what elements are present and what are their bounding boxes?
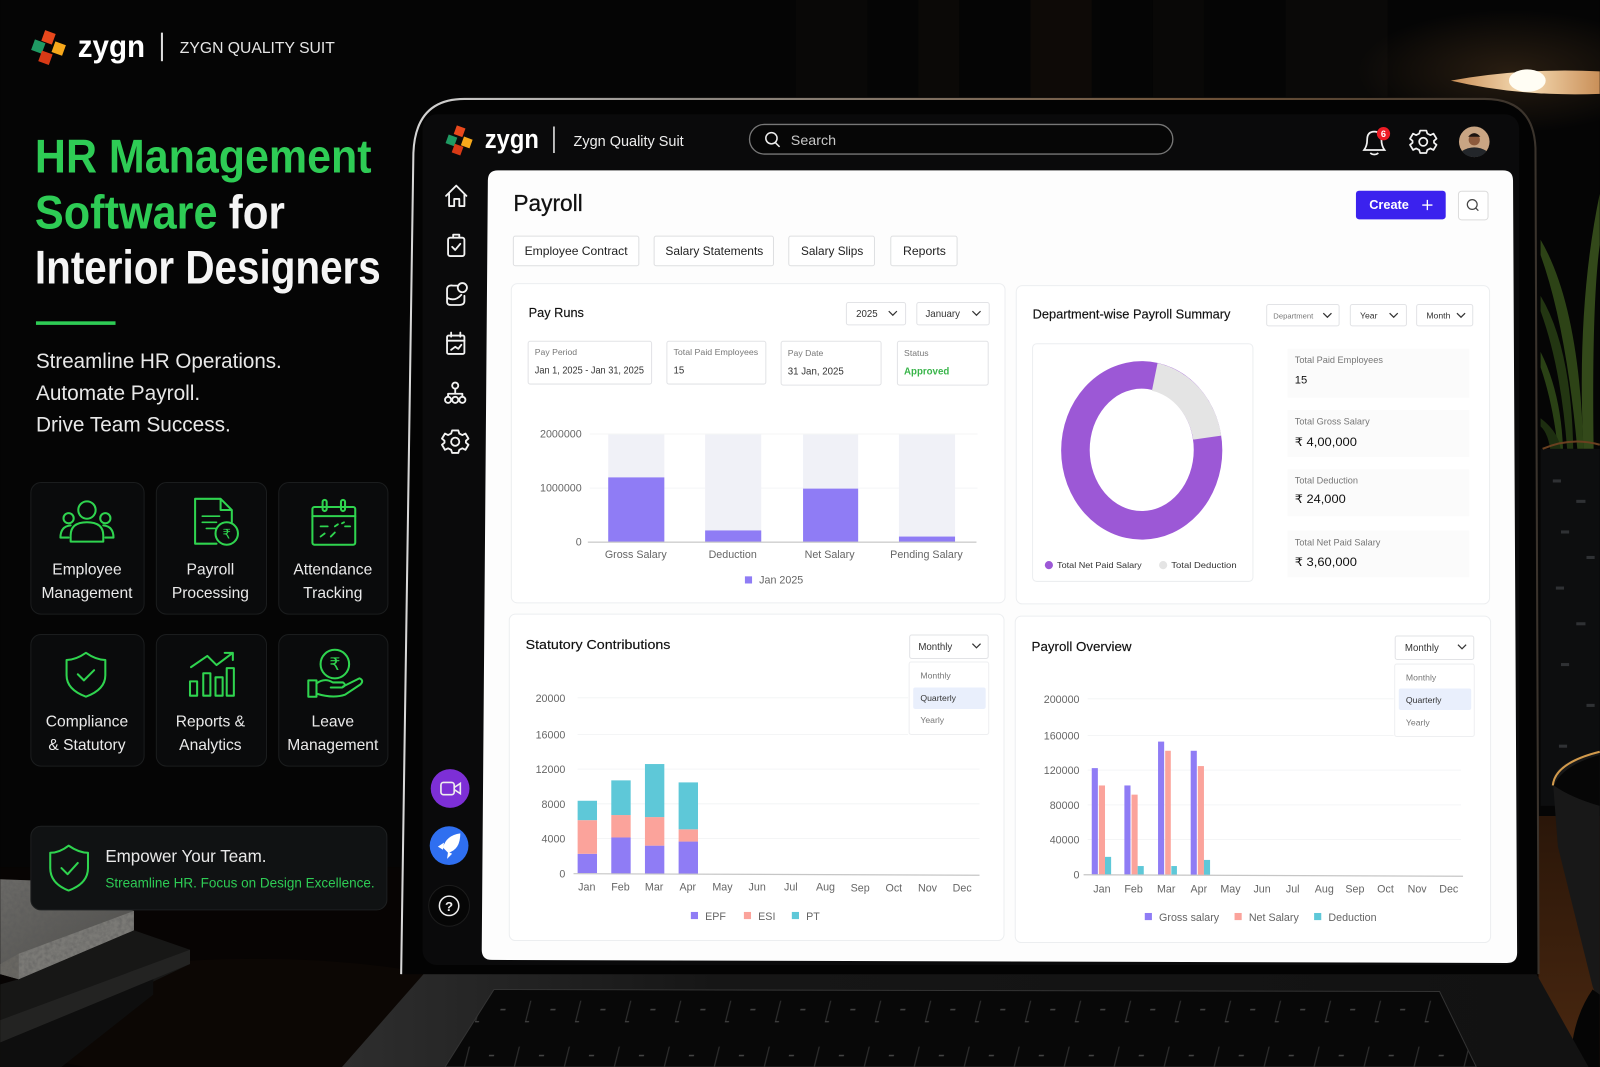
dropdown menu: Quarterly — [1406, 695, 1442, 705]
dropdown: month: Month — [1426, 310, 1451, 320]
grouped bar chart: payroll: 200000 — [1044, 694, 1080, 706]
bar chart: pay runs: 1000000 — [540, 483, 582, 495]
dropdown: month — [917, 302, 989, 325]
grouped bar chart: payroll: Jul — [1286, 884, 1300, 896]
dropdown: monthly: Monthly — [1405, 643, 1439, 654]
icon: logo squares — [31, 30, 66, 65]
tab: reports: Reports — [903, 245, 946, 258]
icon: calendar — [447, 333, 464, 354]
button: video — [431, 769, 469, 808]
tab: salary slips — [789, 236, 874, 266]
grouped bar chart: payroll: Nov — [1408, 884, 1427, 896]
feature card: payroll processing — [156, 482, 266, 614]
grouped bar chart: payroll: Jun — [1253, 884, 1271, 896]
laptop screen frame — [401, 99, 1539, 974]
dropdown: year — [846, 302, 906, 325]
bar chart: pay runs: 2000000 — [540, 429, 582, 441]
stacked bar chart: statutory: Nov — [918, 883, 938, 895]
feature card: employee management: Employee — [52, 561, 122, 578]
stat: total paid employees: 15 — [674, 365, 684, 376]
grouped bar chart: payroll: Sep — [1345, 884, 1364, 896]
divider — [553, 126, 555, 153]
icon: payroll document: ₹ — [222, 527, 231, 542]
create button: Create — [1369, 197, 1409, 212]
dropdown menu: Yearly — [1406, 717, 1430, 727]
main white content panel — [482, 170, 1517, 963]
feature card: attendance tracking: Tracking — [303, 585, 362, 602]
tabs — [513, 236, 957, 266]
donut chart: Total Net Paid Salary — [1057, 560, 1142, 570]
feature card: payroll processing: Processing — [172, 585, 249, 602]
stacked bar chart: statutory: Jan — [578, 882, 595, 894]
grouped bar chart: payroll — [1044, 694, 1463, 924]
stacked bar chart: statutory: 12000 — [536, 764, 565, 776]
stat: status: Approved — [904, 366, 949, 377]
callout heading: Empower Your Team. — [105, 846, 266, 866]
divider — [161, 33, 163, 61]
icon: hand with rupee: ₹ — [329, 654, 340, 674]
feature card: employee management — [31, 482, 144, 614]
feature card: reports and analytics: Reports & — [176, 713, 246, 730]
tab: employee contract: Employee Contract — [525, 245, 628, 258]
stat: total paid employees: 15 — [1295, 375, 1307, 387]
bar chart: pay runs: Jan 2025 — [759, 574, 803, 586]
tab: salary statements — [654, 236, 773, 266]
stat: total gross salary — [1288, 410, 1469, 457]
suite name: ZYGN QUALITY SUIT — [180, 40, 335, 57]
feature card: reports and analytics: Analytics — [179, 737, 242, 754]
search bar: Search — [791, 133, 836, 149]
stacked bar chart: statutory: 8000 — [542, 799, 565, 811]
feature card: attendance tracking: Attendance — [293, 561, 372, 578]
app logo text: zygn — [485, 124, 539, 154]
icon: app logo — [446, 125, 473, 155]
grouped bar chart: payroll: Oct — [1377, 884, 1394, 896]
stacked bar chart: statutory: ESI — [758, 911, 775, 923]
feature card: attendance tracking — [279, 482, 388, 614]
stacked bar chart: statutory: May — [712, 882, 733, 894]
stat: pay period — [528, 341, 652, 384]
grouped bar chart: payroll: Feb — [1124, 884, 1143, 896]
bar chart: pay runs: Net Salary — [805, 549, 855, 561]
heading: statutory contributions: Statutory Contributions — [526, 637, 670, 652]
grouped bar chart: payroll: Net Salary — [1249, 912, 1299, 924]
search button — [1458, 191, 1488, 220]
dropdown menu: Monthly — [1406, 672, 1437, 682]
stat: total paid employees — [1288, 349, 1469, 398]
stacked bar chart: statutory: Apr — [679, 882, 697, 894]
callout text: Streamline HR. Focus on Design Excellence. — [105, 875, 375, 891]
heading: pay runs: Pay Runs — [529, 305, 584, 320]
button: help — [429, 885, 469, 926]
stacked bar chart: statutory: 4000 — [542, 834, 565, 846]
icon: settings — [442, 430, 468, 453]
stacked bar chart: statutory: Dec — [953, 883, 972, 895]
panel: statutory contributions — [509, 614, 1004, 941]
stacked bar chart: statutory: Sep — [851, 883, 870, 895]
icon: attendance calendar — [312, 500, 355, 545]
stacked bar chart: statutory: 0 — [559, 868, 565, 880]
grouped bar chart: payroll: Mar — [1157, 884, 1176, 896]
donut chart — [1033, 344, 1253, 581]
grouped bar chart: payroll: 120000 — [1044, 765, 1080, 777]
dropdown: department: Department — [1273, 311, 1314, 320]
stat: pay period: Jan 1, 2025 - Jan 31, 2025 — [535, 365, 644, 376]
stone blocks — [0, 879, 190, 1067]
bar chart: pay runs: Pending Salary — [890, 549, 963, 561]
donut chart: Total Deduction — [1171, 560, 1237, 570]
grouped bar chart: payroll: Apr — [1191, 884, 1208, 896]
icon: team — [60, 501, 113, 542]
stat: total net paid salary: Total Net Paid Salary — [1295, 538, 1381, 548]
panel: payroll overview — [1015, 616, 1491, 943]
icon: org chart — [445, 383, 465, 403]
icon: shield check — [67, 653, 105, 697]
tab: salary slips: Salary Slips — [801, 245, 863, 258]
heading: department summary: Department-wise Payroll Summary — [1033, 306, 1231, 321]
icon: home — [446, 186, 466, 206]
stat: total deduction: ₹ 24,000 — [1295, 493, 1346, 506]
bar chart: pay runs: Gross Salary — [605, 549, 667, 561]
subheading: Streamline HR Operations. — [36, 349, 282, 373]
stat: total deduction: Total Deduction — [1295, 476, 1358, 486]
dropdown menu — [909, 662, 989, 734]
headline — [35, 130, 381, 294]
stacked bar chart: statutory: 16000 — [536, 730, 565, 742]
plant — [1541, 194, 1600, 454]
feature card: compliance and statutory: & Statutory — [48, 737, 126, 754]
button: rocket — [430, 826, 468, 865]
plant pot — [1541, 441, 1600, 806]
stacked bar chart: statutory: Mar — [645, 882, 664, 894]
dropdown: year: Year — [1360, 310, 1378, 320]
feature card: employee management: Management — [41, 585, 133, 602]
headline: Interior Designers — [35, 242, 381, 294]
icon: notification bell: 6 — [1381, 129, 1386, 139]
stat: total paid employees: Total Paid Employees — [674, 347, 759, 357]
dropdown: month: January — [925, 309, 960, 320]
subheading: Drive Team Success. — [36, 412, 231, 436]
grouped bar chart: payroll: 40000 — [1050, 835, 1080, 847]
feature card: leave management: Management — [287, 737, 379, 754]
tab: employee contract — [513, 236, 639, 266]
stat: pay date — [781, 341, 881, 385]
bar chart: pay runs — [540, 429, 977, 586]
feature card: compliance and statutory — [31, 634, 144, 766]
green accent rule — [36, 321, 116, 325]
feature card: payroll processing: Payroll — [187, 561, 234, 578]
table lamp — [1451, 69, 1600, 94]
tab: salary statements: Salary Statements — [665, 245, 763, 258]
app header — [446, 124, 1490, 157]
icon: notification bell — [1364, 127, 1390, 155]
tab: reports — [891, 236, 957, 266]
stat: status: Status — [904, 348, 929, 358]
grouped bar chart: payroll: Jan — [1093, 884, 1111, 896]
dropdown menu: Yearly — [920, 715, 945, 725]
stat: total net paid salary — [1288, 530, 1469, 577]
stat: status — [897, 341, 988, 385]
stacked bar chart: statutory: 20000 — [536, 693, 565, 705]
bar chart: pay runs: Deduction — [709, 549, 757, 561]
headline: for — [229, 186, 285, 238]
stacked bar chart: statutory: Feb — [611, 882, 630, 894]
coffee cup — [1553, 752, 1600, 1067]
stat: pay period: Pay Period — [535, 347, 577, 357]
grouped bar chart: payroll: Dec — [1439, 884, 1459, 896]
page title: Payroll — [513, 190, 583, 216]
brand logo — [31, 28, 335, 65]
stacked bar chart: statutory: PT — [806, 911, 820, 923]
stat: pay date: 31 Jan, 2025 — [788, 366, 844, 377]
subheading — [36, 349, 282, 436]
dropdown: monthly — [910, 635, 988, 658]
stat: total net paid salary: ₹ 3,60,000 — [1295, 556, 1357, 569]
stat: total gross salary: Total Gross Salary — [1295, 416, 1370, 426]
stat: total deduction — [1288, 469, 1469, 516]
button: help: ? — [445, 899, 453, 914]
grouped bar chart: payroll: 80000 — [1050, 800, 1080, 812]
icon: shield check — [50, 846, 88, 891]
stacked bar chart: statutory: Aug — [816, 882, 835, 894]
stat: total gross salary: ₹ 4,00,000 — [1295, 436, 1357, 449]
stacked bar chart: statutory — [536, 693, 980, 923]
stacked bar chart: statutory: Jun — [749, 882, 766, 894]
stacked bar chart: statutory: Jul — [784, 882, 798, 894]
icon: chart up — [190, 653, 234, 696]
wooden table — [1539, 816, 1600, 1067]
dropdown: department — [1267, 304, 1339, 326]
grouped bar chart: payroll: Gross salary — [1159, 912, 1220, 924]
dropdown: month — [1417, 304, 1473, 326]
grouped bar chart: payroll: May — [1220, 884, 1241, 896]
callout: empower your team — [31, 826, 387, 910]
dropdown: year — [1350, 304, 1406, 326]
stacked bar chart: statutory: Oct — [886, 883, 902, 895]
grouped bar chart: payroll: 0 — [1074, 869, 1080, 881]
grouped bar chart: payroll: 160000 — [1044, 731, 1080, 743]
icon: settings gear — [1410, 131, 1437, 153]
dropdown: monthly — [1395, 636, 1474, 659]
panel: department-wise payroll summary — [1016, 286, 1490, 604]
icon: clipboard — [448, 235, 464, 256]
stat: total paid employees: Total Paid Employees — [1295, 355, 1383, 365]
dropdown menu: Monthly — [920, 670, 951, 680]
feature card: leave management: Leave — [312, 713, 354, 730]
app name: Zygn Quality Suit — [574, 134, 684, 150]
laptop keyboard base — [342, 974, 1589, 1067]
feature card: reports and analytics — [156, 634, 266, 766]
icon: employee care — [447, 283, 467, 305]
subheading: Automate Payroll. — [36, 381, 200, 405]
headline: HR Management — [35, 130, 372, 182]
stacked bar chart: statutory: EPF — [705, 911, 726, 923]
dropdown: monthly: Monthly — [918, 642, 952, 653]
user avatar — [1459, 126, 1490, 157]
sidebar navigation — [429, 186, 469, 926]
dropdown: year: 2025 — [856, 309, 878, 320]
feature card: leave management — [279, 634, 388, 766]
grouped bar chart: payroll: Aug — [1315, 884, 1334, 896]
logo wordmark: zygn — [78, 28, 145, 64]
dropdown menu — [1395, 664, 1474, 736]
stat: total paid employees — [667, 341, 766, 384]
dropdown menu: Quarterly — [920, 693, 957, 703]
create button — [1356, 191, 1446, 219]
heading: payroll overview: Payroll Overview — [1032, 639, 1132, 654]
grouped bar chart: payroll: Deduction — [1328, 912, 1377, 924]
panel: pay runs — [511, 284, 1005, 603]
feature card: compliance and statutory: Compliance — [46, 713, 128, 730]
bar chart: pay runs: 0 — [576, 537, 582, 549]
stat: pay date: Pay Date — [788, 348, 824, 358]
search bar — [750, 124, 1173, 154]
headline: Software — [35, 186, 218, 238]
